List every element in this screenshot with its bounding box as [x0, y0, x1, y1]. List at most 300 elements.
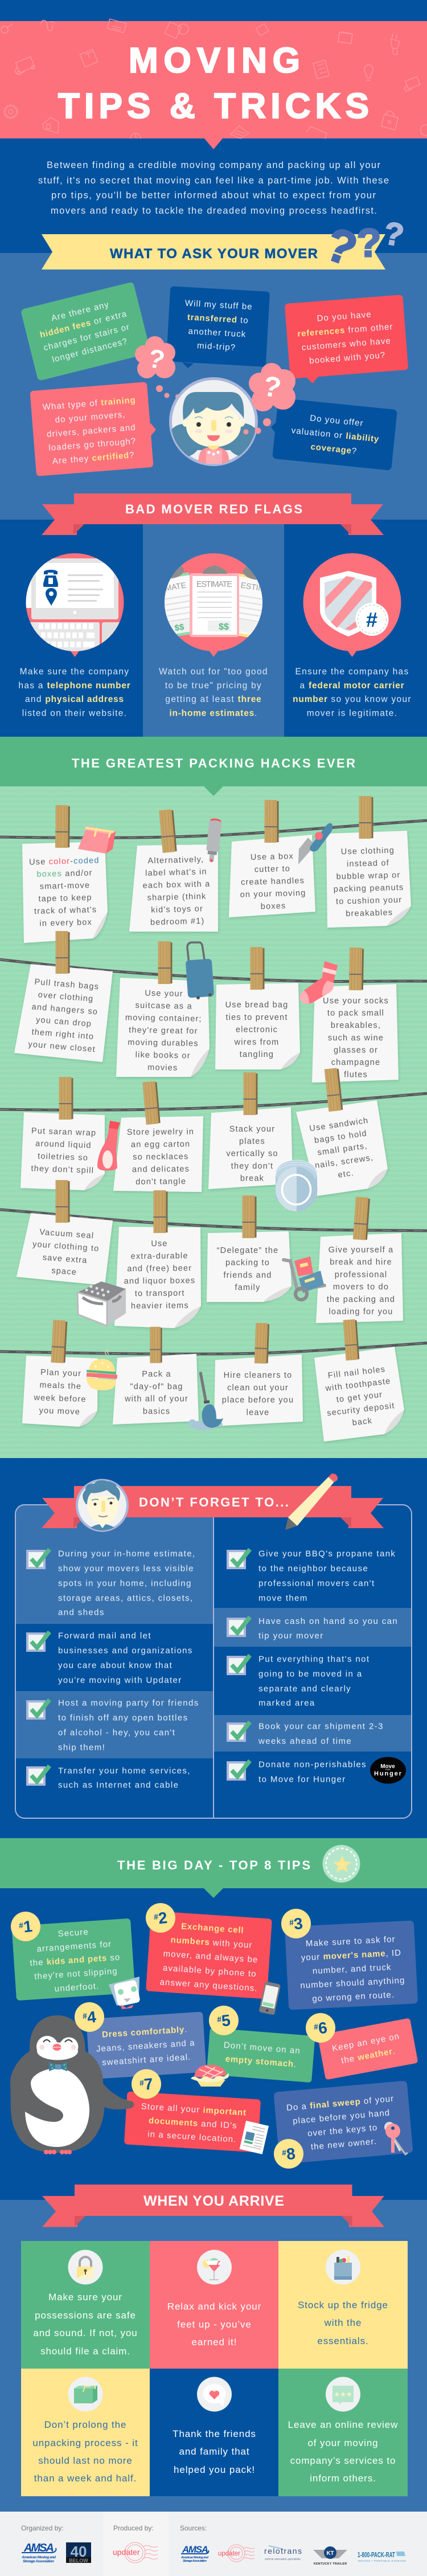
- note: bread bag ties: Use bread bag: [225, 1001, 288, 1010]
- note: use clothing: bubble wrap or: [336, 871, 401, 881]
- icon: suitcase: [186, 942, 214, 999]
- heading ribbon: red flags: [42, 493, 384, 535]
- note: nail holes: with toothpaste: [325, 1377, 391, 1393]
- heading band: packing hacks: [0, 737, 427, 796]
- logo: updater: [113, 2542, 158, 2563]
- icon: moving box: [68, 2377, 102, 2411]
- speech bubble: liability: valuation or liability: [291, 426, 380, 444]
- checklist column: right: [228, 1549, 406, 1785]
- clothesline row 2: [0, 960, 427, 981]
- cell: online review: [278, 2369, 408, 2496]
- note: vacuum seal: space: [51, 1266, 77, 1277]
- speech bubble: hidden fees: charges for stairs or: [43, 322, 131, 353]
- icon: cocktail: [197, 2250, 232, 2285]
- cell: relax: earned it!: [192, 2337, 237, 2348]
- number badges: [11, 1903, 335, 2169]
- note: trash bags: over clothing: [38, 990, 94, 1004]
- note: durable boxes: and (free) beer: [127, 1264, 192, 1273]
- note: sandwich bags: Use sandwich: [309, 1116, 369, 1133]
- note: saran wrap: [20, 1112, 105, 1190]
- note: jewelry: [113, 1116, 203, 1192]
- item: propane tank: Give your BBQ's propane tank: [258, 1549, 396, 1559]
- item: moving party: to finish off any open bottles: [58, 1713, 188, 1723]
- illustration: clipboards: [165, 553, 262, 657]
- note: nail holes: to get your: [336, 1390, 383, 1405]
- note: box cutter handles: [229, 835, 315, 917]
- note: stack plates: Stack your: [229, 1125, 275, 1134]
- speech bubble: hidden fees: [20, 281, 151, 381]
- number badges: 3: [293, 1914, 303, 1933]
- note: socks: to pack small: [327, 1009, 384, 1018]
- note: jewelry: an egg carton: [131, 1140, 190, 1149]
- panel: the big day: [0, 1838, 427, 2200]
- checklist column: left: [27, 1549, 199, 1790]
- logo: AMSA organizer: [21, 2542, 56, 2563]
- note: vacuum seal: your clothing to: [32, 1240, 100, 1254]
- number badges: #: [289, 1917, 294, 1927]
- icon: gift box: [78, 826, 116, 854]
- cell: thank friends: and family that: [179, 2446, 250, 2457]
- tip card 2: [146, 1911, 272, 1999]
- note: trash bags: Pull trash bags: [34, 978, 100, 991]
- logo: AMSA organizer: Storage Association: [23, 2559, 54, 2563]
- tip card 5: [207, 2028, 315, 2083]
- item: forward mail: businesses and organizations: [58, 1646, 193, 1656]
- illustration: clipboards: ESTIMATE: [196, 580, 232, 589]
- tip card 1: [11, 1918, 136, 2001]
- note: color-coded boxes: in every box: [39, 918, 92, 928]
- logo: AMSA source: AMSA: [182, 2544, 208, 2555]
- item: cash tip: Have cash on hand so you can: [258, 1616, 398, 1626]
- cell: fridge: with the: [324, 2317, 362, 2328]
- icon: grocery bag: [326, 2250, 360, 2285]
- note: suitcase: movies: [147, 1063, 178, 1073]
- note: jewelry: so necklaces: [133, 1152, 189, 1162]
- note: label with sharpie: [129, 844, 218, 932]
- note: suitcase: like books or: [136, 1051, 191, 1060]
- note: trash bags: your new closet: [28, 1040, 96, 1054]
- panel: when you arrive: [0, 2185, 427, 2512]
- number badges: #: [18, 1920, 24, 1930]
- cell: possessions: possessions are safe: [35, 2310, 136, 2321]
- note: durable boxes: heavier items: [131, 1301, 189, 1311]
- note: professional movers: professional: [335, 1270, 387, 1279]
- note: professional movers: [316, 1233, 403, 1323]
- tip card 6: [318, 2018, 418, 2080]
- clothespins: [51, 796, 373, 1363]
- footer labels: Sources:: [180, 2524, 207, 2532]
- item: in-home estimate: and sheds: [58, 1608, 105, 1617]
- speech bubble: references: booked with you?: [309, 350, 386, 366]
- footer labels: Produced by:: [113, 2524, 154, 2532]
- note: box cutter handles: create handles: [241, 876, 305, 887]
- icon: heart bubble: [197, 2377, 232, 2411]
- note: bread bag ties: [215, 983, 300, 1069]
- note: socks: breakables,: [331, 1021, 381, 1030]
- note: day-of bag: basics: [143, 1407, 170, 1416]
- logo: move for hunger: Move: [380, 1763, 395, 1770]
- note: hire cleaners: clean out your: [227, 1383, 289, 1393]
- avatar: woman: [167, 378, 260, 465]
- note: bread bag ties: electronic: [236, 1026, 278, 1035]
- note: trash bags: [14, 964, 113, 1062]
- note: label with sharpie: sharpie (think: [147, 892, 207, 903]
- number badges: 7: [143, 2075, 154, 2093]
- illustration: clipboards: $$: [219, 622, 229, 632]
- icon: location pin: [46, 588, 57, 606]
- tip card 5: empty stomach.: [225, 2054, 297, 2069]
- avatar: man: [77, 1480, 128, 1538]
- note: stack plates: [208, 1107, 293, 1189]
- logo: AMSA source: [180, 2544, 209, 2563]
- logo: relotrans: relotrans: [264, 2546, 302, 2555]
- note: saran wrap: toiletries so: [38, 1152, 88, 1163]
- logo: 40 below: BELOW: [69, 2558, 88, 2563]
- note: label with sharpie: each box with a: [142, 880, 211, 891]
- note: socks: such as wine: [328, 1034, 384, 1043]
- note: suitcase: [116, 978, 210, 1077]
- note: professional movers: movers to do: [333, 1283, 389, 1292]
- note: stack plates: vertically so: [226, 1149, 278, 1158]
- note: durable boxes: and liquor boxes: [124, 1276, 195, 1286]
- item: moving party: [27, 1698, 199, 1753]
- speech bubble: references: Do you have: [317, 309, 372, 324]
- note: plan meals: Plan your: [40, 1368, 81, 1378]
- note: socks: champagne: [331, 1058, 380, 1067]
- speech bubble: hidden fees: hidden fees or extra: [39, 309, 128, 340]
- item: donate: Donate non-perishables: [258, 1759, 367, 1770]
- icon: pencil: [285, 1473, 338, 1530]
- illustration: shield: #: [366, 608, 377, 631]
- tip card 3: number, and truck: [312, 1962, 392, 1976]
- icon: question marks: ?: [319, 218, 364, 276]
- icon: review card: [326, 2377, 360, 2411]
- icon: bottle: [97, 1121, 120, 1170]
- note: color-coded boxes: track of what's: [34, 905, 97, 916]
- tip card 2: available by phone to: [163, 1963, 257, 1979]
- item: propane tank: move them: [258, 1593, 308, 1603]
- note: label with sharpie: label what's in: [145, 867, 207, 878]
- tip card 6: Keep an eye on: [331, 2031, 400, 2054]
- item: propane tank: professional movers can't: [258, 1578, 375, 1589]
- note: trash bags: them right into: [31, 1027, 95, 1042]
- item: transfer home services: such as Internet and cable: [58, 1780, 179, 1790]
- note: socks: glasses or: [334, 1046, 378, 1055]
- note: label with sharpie: kid's toys or: [151, 904, 203, 915]
- tip card 1: underfoot.: [54, 1981, 100, 1994]
- logo: updater: updater: [113, 2548, 140, 2557]
- item: transfer home services: Transfer your home services,: [58, 1766, 191, 1775]
- tip card 2: mover, and always be: [163, 1949, 258, 1965]
- cell: online review: inform others.: [310, 2473, 376, 2484]
- number badges: #: [139, 2078, 145, 2088]
- bow tie: [49, 2062, 67, 2071]
- caption: to be true" pricing by: [165, 681, 262, 691]
- item: forward mail: you're moving with Updater: [58, 1675, 182, 1685]
- note: sandwich bags: bags to hold: [314, 1129, 368, 1145]
- tip card 1: the kids and pets so: [30, 1953, 121, 1968]
- checklist frame: [15, 1505, 412, 1818]
- note: stack plates: break: [240, 1174, 264, 1183]
- number badges: #: [281, 2148, 287, 2157]
- cell: relax: feet up - you’ve: [177, 2319, 252, 2330]
- tip card 1: Secure: [58, 1927, 89, 1939]
- tip card 7: [124, 2091, 261, 2153]
- speech bubble: training: What type of training: [42, 395, 136, 412]
- icon: star badge: [322, 1845, 360, 1883]
- caption: Make sure the company: [20, 667, 129, 677]
- red flag 2: estimates: [159, 553, 266, 716]
- tip card 8: Do a final sweep of your: [286, 2094, 395, 2113]
- item: car shipment: [228, 1722, 384, 1746]
- item: donate: [228, 1759, 367, 1785]
- note: vacuum seal: save extra: [42, 1253, 88, 1265]
- number badges: 2: [158, 1909, 168, 1927]
- note: saran wrap: they don't spill: [31, 1164, 94, 1175]
- heading ribbon: when you arrive: [42, 2185, 384, 2227]
- logo: relotrans: vehicle relocation specialists: [265, 2558, 301, 2561]
- note: nail holes: [314, 1347, 404, 1442]
- logo: 1-800-pack-rat: [358, 2550, 406, 2562]
- tip card 7: in a secure location.: [147, 2129, 237, 2145]
- item: propane tank: [228, 1549, 396, 1603]
- red flag 1: website contact: [17, 553, 131, 718]
- tip card 7: documents and ID's: [149, 2116, 237, 2131]
- item: moving party: Host a moving party for friends: [58, 1698, 199, 1708]
- item: car shipment: weeks ahead of time: [258, 1737, 352, 1746]
- caption: [293, 667, 412, 718]
- logo: relotrans: [264, 2546, 302, 2561]
- note: plan meals: [22, 1356, 98, 1427]
- item: separate area: going to be moved in a: [258, 1669, 363, 1679]
- cell: thank friends: Thank the friends: [173, 2428, 256, 2439]
- cell: unpacking: unpacking process - it: [32, 2438, 138, 2448]
- note: box cutter handles: Use a box: [251, 852, 294, 862]
- caption: getting at least three: [165, 695, 262, 704]
- note: bread bag ties: tangling: [240, 1050, 274, 1059]
- item: donate: to Move for Hunger: [258, 1774, 346, 1785]
- speech bubble: references: references from other: [297, 322, 393, 339]
- note: color-coded boxes: [22, 842, 108, 943]
- note: bread bag ties: ties to prevent: [225, 1013, 288, 1022]
- icon: hand truck: [284, 1256, 325, 1300]
- caption: in-home estimates.: [169, 709, 258, 718]
- clothesline row 1: [0, 820, 427, 838]
- tip card 6: the weather.: [340, 2046, 396, 2065]
- cell: possessions: [21, 2241, 150, 2369]
- caption: a federal motor carrier: [300, 681, 404, 691]
- clothesline row 3: [0, 1093, 427, 1110]
- main title: TIPS & TRICKS: [58, 87, 369, 126]
- intro text: movers and ready to tackle the dreaded moving process headfirst.: [51, 206, 377, 216]
- speech bubble: liability: Do you offer: [310, 413, 364, 428]
- note: hire cleaners: Hire cleaners to: [224, 1371, 292, 1380]
- note: plan meals: meals the: [39, 1381, 81, 1391]
- panel: footer: [0, 2512, 427, 2576]
- note: nail holes: back: [352, 1416, 373, 1428]
- tip card 3: go wrong en route.: [312, 1990, 395, 2004]
- note: vacuum seal: [17, 1213, 113, 1285]
- note: use clothing: Use clothing: [341, 846, 395, 856]
- note: professional movers: the packing and: [327, 1295, 395, 1304]
- speech bubble: references: [285, 295, 408, 383]
- number badges: 5: [221, 2011, 231, 2030]
- cell: fridge: essentials.: [317, 2336, 369, 2346]
- caption: listed on their website.: [22, 709, 127, 718]
- note: use clothing: instead of: [347, 859, 389, 869]
- speech bubble: transferred: transferred to: [187, 312, 249, 325]
- icon: crate: [77, 1281, 126, 1326]
- icon: review card: ★★★: [334, 2390, 352, 2398]
- illustration: clipboards: IMATE: [162, 580, 187, 593]
- note: trash bags: and hangers so: [31, 1002, 98, 1016]
- caption: [18, 667, 131, 718]
- heading ribbon: red flags: BAD MOVER RED FLAGS: [125, 502, 302, 516]
- note: stack plates: they don't: [231, 1162, 273, 1171]
- item: forward mail: Forward mail and let: [58, 1631, 151, 1641]
- tip card 2: numbers with your: [170, 1935, 253, 1950]
- number badges: #: [216, 2014, 222, 2024]
- logo: AMSA source: American Moving and: [180, 2556, 209, 2559]
- tip card 4: [86, 2012, 207, 2079]
- tip card 4: Dress comfortably.: [102, 2024, 188, 2040]
- tip card 4: sweatshirt are ideal.: [102, 2052, 191, 2068]
- note: delegate: friends and: [224, 1271, 272, 1280]
- item: in-home estimate: [27, 1549, 196, 1617]
- panel: what to ask your mover: [0, 214, 427, 528]
- speech bubble: training: [30, 382, 156, 476]
- logo: updater source: [218, 2545, 254, 2562]
- note: color-coded boxes: Use color-coded: [29, 856, 100, 867]
- tip card 4: Jeans, sneakers and a: [96, 2038, 195, 2054]
- note: day-of bag: "day-of" bag: [130, 1382, 183, 1391]
- speech bubble: liability: coverage?: [310, 442, 358, 456]
- number badges: #: [153, 1912, 159, 1921]
- note: sandwich bags: etc.: [338, 1169, 355, 1180]
- heading ribbon: what to ask your mover: WHAT TO ASK YOUR MOVER: [110, 246, 318, 262]
- cell: fridge: [278, 2241, 408, 2369]
- note: day-of bag: [113, 1354, 199, 1424]
- note: professional movers: Give yourself a: [329, 1246, 393, 1255]
- thought cloud left: [135, 336, 180, 399]
- note: delegate: family: [235, 1283, 261, 1292]
- tip card 8: place before you hand: [293, 2108, 391, 2126]
- note: label with sharpie: bedroom #1): [150, 917, 205, 927]
- note: label with sharpie: Alternatively,: [147, 855, 204, 866]
- note: durable boxes: to transport: [135, 1289, 185, 1299]
- tip card 8: the new owner.: [310, 2137, 377, 2152]
- icon: burger: [87, 1349, 117, 1390]
- speech bubble: transferred: mid-trip?: [197, 341, 236, 353]
- note: box cutter handles: cutter to: [254, 864, 290, 875]
- note: color-coded boxes: tape to keep: [38, 893, 92, 904]
- icon: marker: [205, 819, 222, 863]
- tip card 2: answer any questions.: [159, 1977, 258, 1993]
- logo: 1-800-pack-rat: MOVING • PORTABLE STORAGE: [358, 2559, 406, 2562]
- note: saran wrap: Put saran wrap: [31, 1126, 97, 1138]
- thought cloud right: ?: [260, 369, 284, 405]
- logo: 40 below: [66, 2542, 91, 2563]
- heading ribbon: what to ask your mover: [42, 234, 385, 270]
- item: forward mail: [27, 1631, 193, 1685]
- icon: keys: [384, 2122, 408, 2154]
- note: socks: [312, 984, 399, 1083]
- item: in-home estimate: spots in your home, including: [58, 1578, 192, 1589]
- note: suitcase: suitcase as a: [135, 1001, 192, 1011]
- main title: [58, 41, 369, 126]
- speech bubble: hidden fees: longer distances?: [51, 336, 129, 365]
- note: suitcase: Use your: [145, 989, 183, 999]
- clothesline row 4: [0, 1210, 427, 1231]
- footer labels: [21, 2524, 207, 2532]
- caption: Watch out for "too good: [159, 667, 268, 677]
- note: stack plates: plates: [239, 1137, 265, 1146]
- logo: AMSA organizer: AMSA: [23, 2542, 54, 2554]
- speech bubble: transferred: [166, 286, 270, 368]
- speech bubble: transferred: Will my stuff be: [184, 299, 253, 312]
- caption: Ensure the company has: [295, 667, 409, 677]
- icon: question marks: ?: [357, 221, 381, 265]
- note: vacuum seal: Vacuum seal: [39, 1228, 95, 1240]
- item: separate area: Put everything that's not: [258, 1655, 369, 1664]
- cell: fridge: Stock up the fridge: [298, 2300, 388, 2310]
- cell: online review: company’s services to: [290, 2455, 396, 2466]
- tip card 1: arrangements for: [36, 1940, 112, 1954]
- item: separate area: marked area: [258, 1698, 315, 1708]
- red flag 3: motor carrier number: [293, 553, 412, 718]
- header background: [0, 0, 427, 253]
- icon: dog: [109, 1977, 141, 2009]
- number badges: 1: [23, 1917, 33, 1936]
- heading band: big day: THE BIG DAY - TOP 8 TIPS: [117, 1858, 310, 1872]
- note: sandwich bags: nails, screws,: [314, 1153, 374, 1170]
- footer labels: Organized by:: [21, 2524, 64, 2532]
- illustration: penguin: [10, 2015, 134, 2154]
- note: hire cleaners: [214, 1354, 303, 1426]
- panel: bad mover red flags: [0, 493, 427, 737]
- logo: 40 below: 40: [71, 2543, 87, 2560]
- cell: unpacking: Don’t prolong the: [44, 2419, 126, 2430]
- intro text: pro tips, you'll be better informed about what to expect from your: [51, 190, 376, 201]
- caption: number so you know your: [293, 695, 412, 704]
- tip card 3: [285, 1920, 418, 2010]
- panel: don't forget: [15, 1473, 412, 1819]
- item: car shipment: Book your car shipment 2-3: [258, 1722, 384, 1731]
- note: socks: flutes: [344, 1071, 368, 1080]
- icon: telephone: [43, 570, 58, 587]
- icon: padlock: [68, 2250, 102, 2285]
- item: cash tip: [228, 1616, 398, 1641]
- speech bubble: liability: [271, 398, 397, 471]
- item: in-home estimate: show your movers less visible: [58, 1563, 194, 1574]
- note: socks: Use your socks: [323, 997, 389, 1006]
- illustration: laptop: [17, 553, 125, 657]
- note: box cutter handles: boxes: [261, 901, 286, 911]
- item: propane tank: to the neighbor because: [258, 1563, 368, 1574]
- note: hire cleaners: leave: [247, 1408, 269, 1417]
- heading band: big day: [0, 1838, 427, 1898]
- logo: 1-800-pack-rat: 1-800-PACK-RAT: [358, 2550, 395, 2559]
- number badges: #: [313, 2022, 319, 2031]
- logo: AMSA source: Storage Association: [183, 2559, 207, 2563]
- cell: online review: Leave an online review: [288, 2419, 398, 2430]
- tip card 3: your mover's name, ID: [301, 1948, 402, 1963]
- number badges: #: [82, 2011, 88, 2020]
- item: in-home estimate: storage areas, attics, closets,: [58, 1593, 194, 1603]
- icon: plates: [276, 1160, 318, 1211]
- note: use clothing: packing peanuts: [334, 883, 404, 894]
- tip card 8: over the keys to: [307, 2122, 378, 2138]
